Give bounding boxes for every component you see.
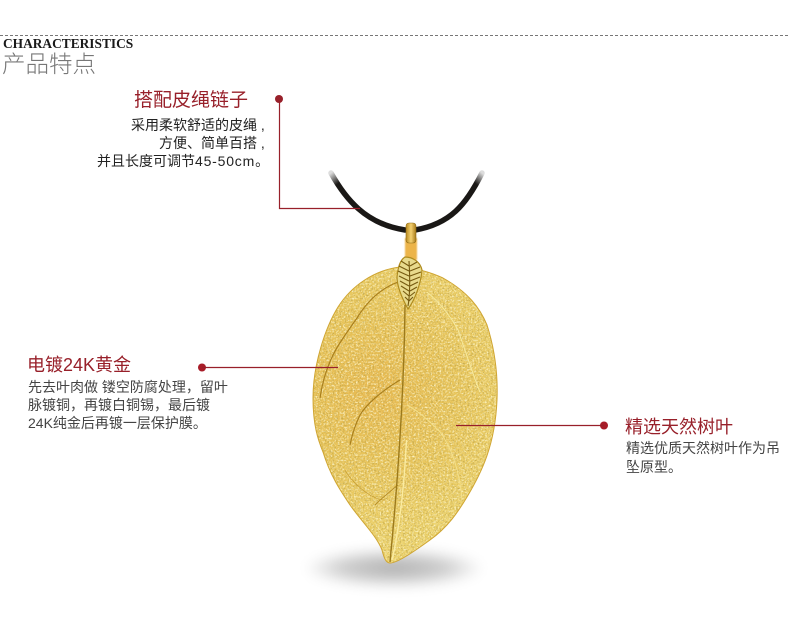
heading: 24K gold plating: 电镀24K黄金 [27, 355, 131, 375]
text block: 24K gold plating [27, 355, 228, 431]
text block: natural leaf [625, 417, 780, 475]
pendant bail [405, 223, 417, 260]
callout line: 24K gold plating [198, 364, 338, 372]
necklace cord [331, 173, 482, 230]
title: Chinese heading: 产品特点 [2, 51, 96, 77]
leaf drop shadow [304, 548, 484, 588]
text block: leather cord [97, 90, 269, 169]
gold pendant leaf [312, 266, 498, 564]
heading: natural leaf: 精选天然树叶 [625, 417, 733, 437]
callout line: leather cord [275, 95, 360, 208]
body: 24K gold plating: 24K纯金后再镀一层保护膜。 [28, 415, 207, 431]
heading: leather cord: 搭配皮绳链子 [134, 90, 248, 111]
body: 24K gold plating: 先去叶肉做 镂空防腐处理，留叶 [28, 379, 228, 395]
title: English heading: CHARACTERISTICS [3, 36, 133, 51]
body: line 2: 方便、简单百搭 , [159, 135, 265, 151]
small decorative leaf charm [397, 257, 422, 309]
body: line 1: 采用柔软舒适的皮绳 , [131, 117, 265, 133]
body: 24K gold plating [28, 379, 228, 431]
body: natural leaf: 坠原型。 [626, 459, 682, 475]
body: natural leaf: 精选优质天然树叶作为吊 [626, 440, 780, 456]
body: line 3: 并且长度可调节45-50cm。 [97, 153, 269, 169]
body: natural leaf [626, 440, 780, 475]
header dashed rule [0, 34, 790, 36]
body: 24K gold plating: 脉镀铜，再镀白铜锡，最后镀 [28, 397, 210, 413]
callout line: natural leaf [456, 422, 608, 430]
